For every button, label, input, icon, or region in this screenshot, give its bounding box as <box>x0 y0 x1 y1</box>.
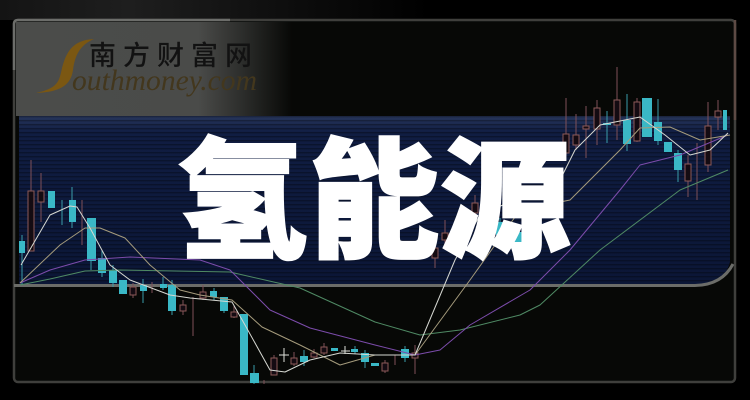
red candle wicks <box>31 67 718 384</box>
purple moving average <box>20 135 728 355</box>
logo backdrop <box>16 22 292 116</box>
cyan candle bodies <box>19 98 727 383</box>
cyan candle wicks <box>22 94 678 384</box>
hollow red candle bodies <box>28 100 721 375</box>
white moving average <box>21 117 728 372</box>
green moving average <box>20 170 728 335</box>
logo Chinese name: 南方财富网 <box>89 34 259 73</box>
blue band <box>19 116 730 285</box>
title: 能 <box>309 129 439 275</box>
logo swoosh S <box>36 39 94 93</box>
logo: southmoney <box>36 34 259 97</box>
title: 源 <box>440 129 570 275</box>
moving average lines <box>20 117 730 372</box>
logo web address: outhmoney.com <box>72 64 257 97</box>
white cross candles <box>279 346 350 362</box>
candlesticks <box>19 67 727 384</box>
band scanlines <box>19 116 730 285</box>
title <box>177 129 570 275</box>
band lower border <box>14 264 733 286</box>
tan moving average <box>20 127 730 365</box>
title: 氢 <box>177 129 307 275</box>
